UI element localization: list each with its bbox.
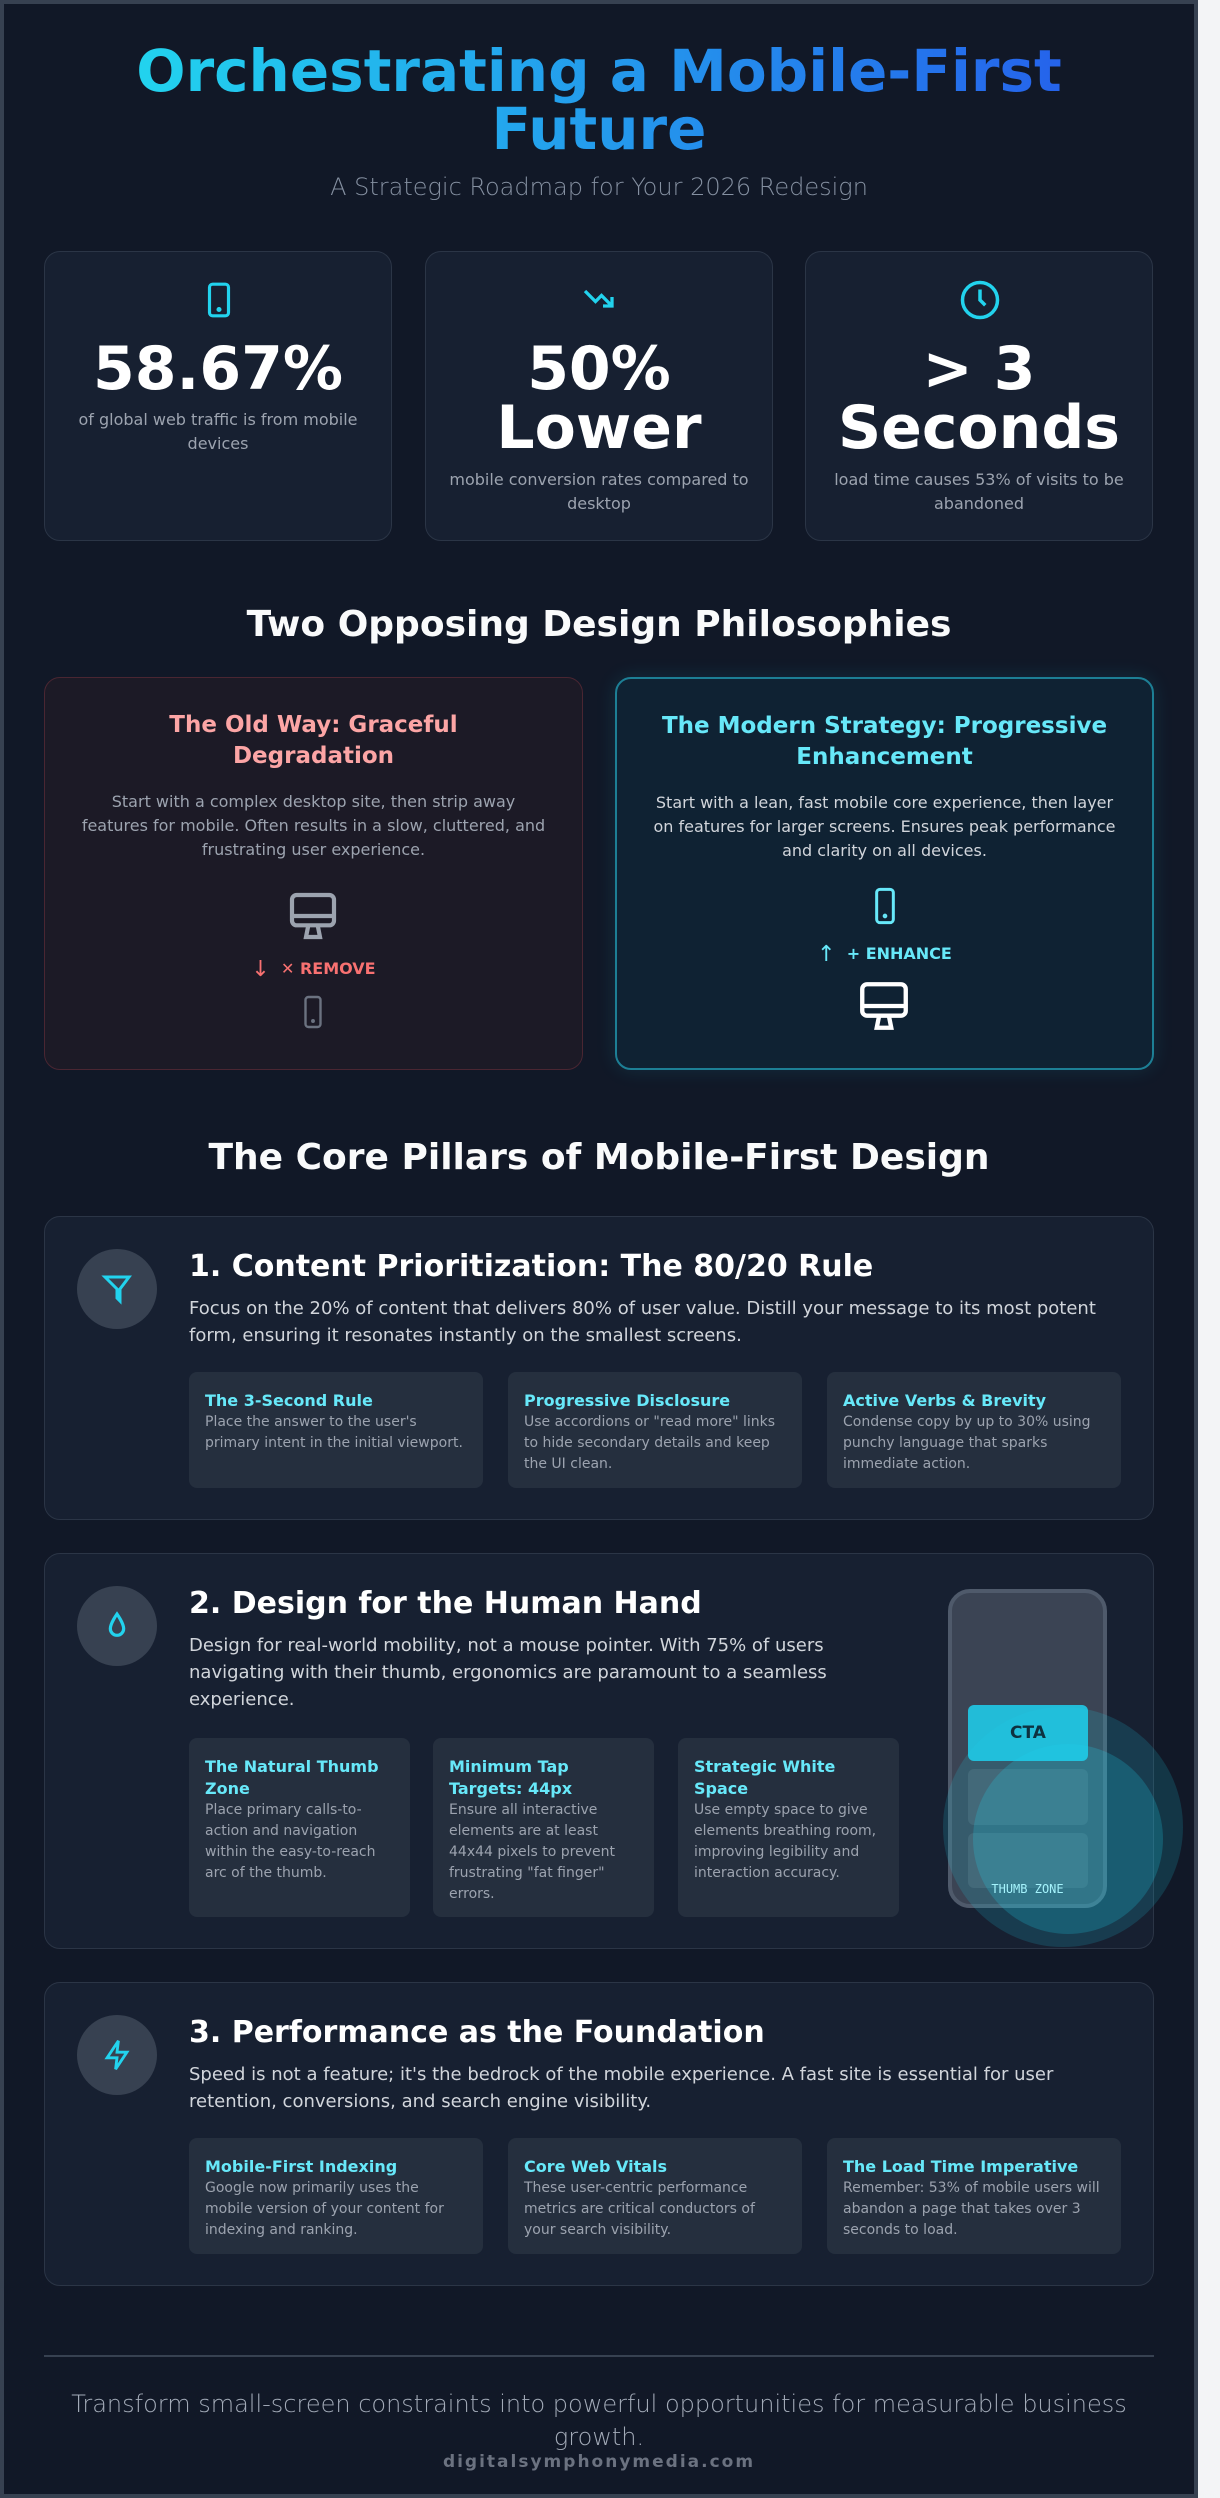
pillar title: 3. Performance as the Foundation <box>189 2015 765 2050</box>
subcard: Remember: 53% of mobile users will abandon a page that takes over 3 seconds to load. <box>843 2180 1100 2238</box>
panel title <box>169 712 458 769</box>
icon: phone <box>208 282 230 318</box>
subcard: Use empty space to give elements breathing room, improving legibility and interaction accuracy. <box>694 1802 876 1881</box>
footer tagline: Transform small-screen constraints into powerful opportunities for measurable business growth. <box>71 2390 1127 2451</box>
stat number: > 3 <box>923 334 1035 404</box>
panel: modern strategy <box>615 677 1154 1070</box>
stat number <box>496 334 702 463</box>
stat number: Lower <box>496 393 702 463</box>
subcard <box>433 1738 654 1917</box>
subcard: Condense copy by up to 30% using punchy language that sparks immediate action. <box>843 1414 1091 1472</box>
stat number <box>838 334 1120 463</box>
icon: phone <box>875 888 895 924</box>
stat card: conversion <box>425 251 773 541</box>
panel title: The Modern Strategy: Progressive <box>662 713 1107 739</box>
subcard: Ensure all interactive elements are at least 44x44 pixels to prevent frustrating "fat finger" errors. <box>449 1802 615 1902</box>
subcard: The 3-Second Rule <box>205 1391 373 1410</box>
subcard: Place primary calls-to-action and navigation within the easy-to-reach arc of the thumb. <box>205 1802 376 1881</box>
icon: funnel <box>77 1249 157 1329</box>
stat description: mobile conversion rates compared to desktop <box>449 470 749 513</box>
subcard: Mobile-First Indexing <box>205 2157 397 2176</box>
subcard: Use accordions or "read more" links to hide secondary details and keep the UI clean. <box>524 1414 775 1472</box>
icon: desktop <box>860 982 908 1030</box>
subcard: Place the answer to the user's primary intent in the initial viewport. <box>205 1414 463 1451</box>
enhance arrow label: ↑ + ENHANCE <box>817 942 952 967</box>
stat number: Seconds <box>838 393 1120 463</box>
phone mockup with thumb zone: CTA <box>1010 1723 1046 1743</box>
subcard: These user-centric performance metrics are critical conductors of your search visibility. <box>524 2180 755 2238</box>
panel title <box>662 713 1107 770</box>
pillar title: 2. Design for the Human Hand <box>189 1586 702 1621</box>
subcard <box>678 1738 899 1917</box>
subtitle: A Strategic Roadmap for Your 2026 Redesign <box>330 173 868 201</box>
pillar text: Focus on the 20% of content that delivers 80% of user value. Distill your message to its most potent form, ensuring it resonates instantly on the smallest screens. <box>189 1298 1096 1346</box>
subcard: Core Web Vitals <box>524 2157 667 2176</box>
pillar text: Speed is not a feature; it's the bedrock of the mobile experience. A fast site is essential for user retention, conversions, and search engine visibility. <box>189 2064 1053 2112</box>
pillar text: Design for real-world mobility, not a mouse pointer. With 75% of users navigating with their thumb, ergonomics are paramount to a seamless experience. <box>189 1635 827 1710</box>
subcard: Progressive Disclosure <box>524 1391 730 1410</box>
stat description: of global web traffic is from mobile devices <box>78 410 358 453</box>
panel title: Degradation <box>233 743 394 769</box>
subcard: Active Verbs & Brevity <box>843 1391 1046 1410</box>
panel text: Start with a lean, fast mobile core experience, then layer on features for larger screens. Ensures peak performance and clarity on all devices. <box>653 793 1116 860</box>
panel: pillar 1 <box>44 1216 1154 1520</box>
panel title: The Old Way: Graceful <box>169 712 458 738</box>
icon: phone <box>304 996 322 1028</box>
subcard <box>827 2138 1121 2254</box>
subcard: Minimum Tap Targets: 44px <box>449 1757 572 1798</box>
heading: core pillars: The Core Pillars of Mobile-First Design <box>208 1137 990 1178</box>
footer domain: digitalsymphonymedia.com <box>443 2452 755 2472</box>
icon: bolt <box>77 2015 157 2095</box>
icon: desktop <box>290 892 336 940</box>
subcard <box>189 2138 483 2254</box>
heading: philosophies: Two Opposing Design Philosophies <box>247 604 951 645</box>
icon: trend down <box>584 290 614 308</box>
stat description: load time causes 53% of visits to be abandoned <box>834 470 1124 513</box>
panel: old way <box>44 677 583 1070</box>
stat number: 50% <box>527 334 671 404</box>
stat number: 58.67% <box>93 334 343 404</box>
panel text: Start with a complex desktop site, then strip away features for mobile. Often results in a slow, cluttered, and frustrating user experience. <box>82 792 545 859</box>
subcard: Google now primarily uses the mobile version of your content for indexing and ranking. <box>205 2180 444 2238</box>
panel: pillar 3 <box>44 1982 1154 2286</box>
panel: pillar 2 <box>44 1553 1154 1949</box>
phone mockup with thumb zone: THUMB ZONE <box>991 1882 1064 1896</box>
phone mockup with thumb zone <box>943 1589 1183 1947</box>
stat card: traffic <box>44 251 392 541</box>
title: Orchestrating a Mobile-First <box>136 37 1062 105</box>
title <box>136 37 1062 163</box>
subcard <box>508 2138 802 2254</box>
panel title: Enhancement <box>796 744 973 770</box>
subcard <box>189 1738 410 1917</box>
subcard <box>508 1372 802 1488</box>
subcard: The Load Time Imperative <box>843 2157 1078 2176</box>
subcard: Strategic White Space <box>694 1757 835 1798</box>
icon: clock <box>960 280 1000 320</box>
subcard <box>189 1372 483 1488</box>
remove arrow label: ↓ ✕ REMOVE <box>251 957 376 982</box>
icon: drop <box>77 1586 157 1666</box>
subcard: The Natural Thumb Zone <box>205 1757 379 1798</box>
stat card: load time <box>805 251 1153 541</box>
pillar title: 1. Content Prioritization: The 80/20 Rule <box>189 1249 873 1284</box>
title: Future <box>492 95 706 163</box>
subcard <box>827 1372 1121 1488</box>
